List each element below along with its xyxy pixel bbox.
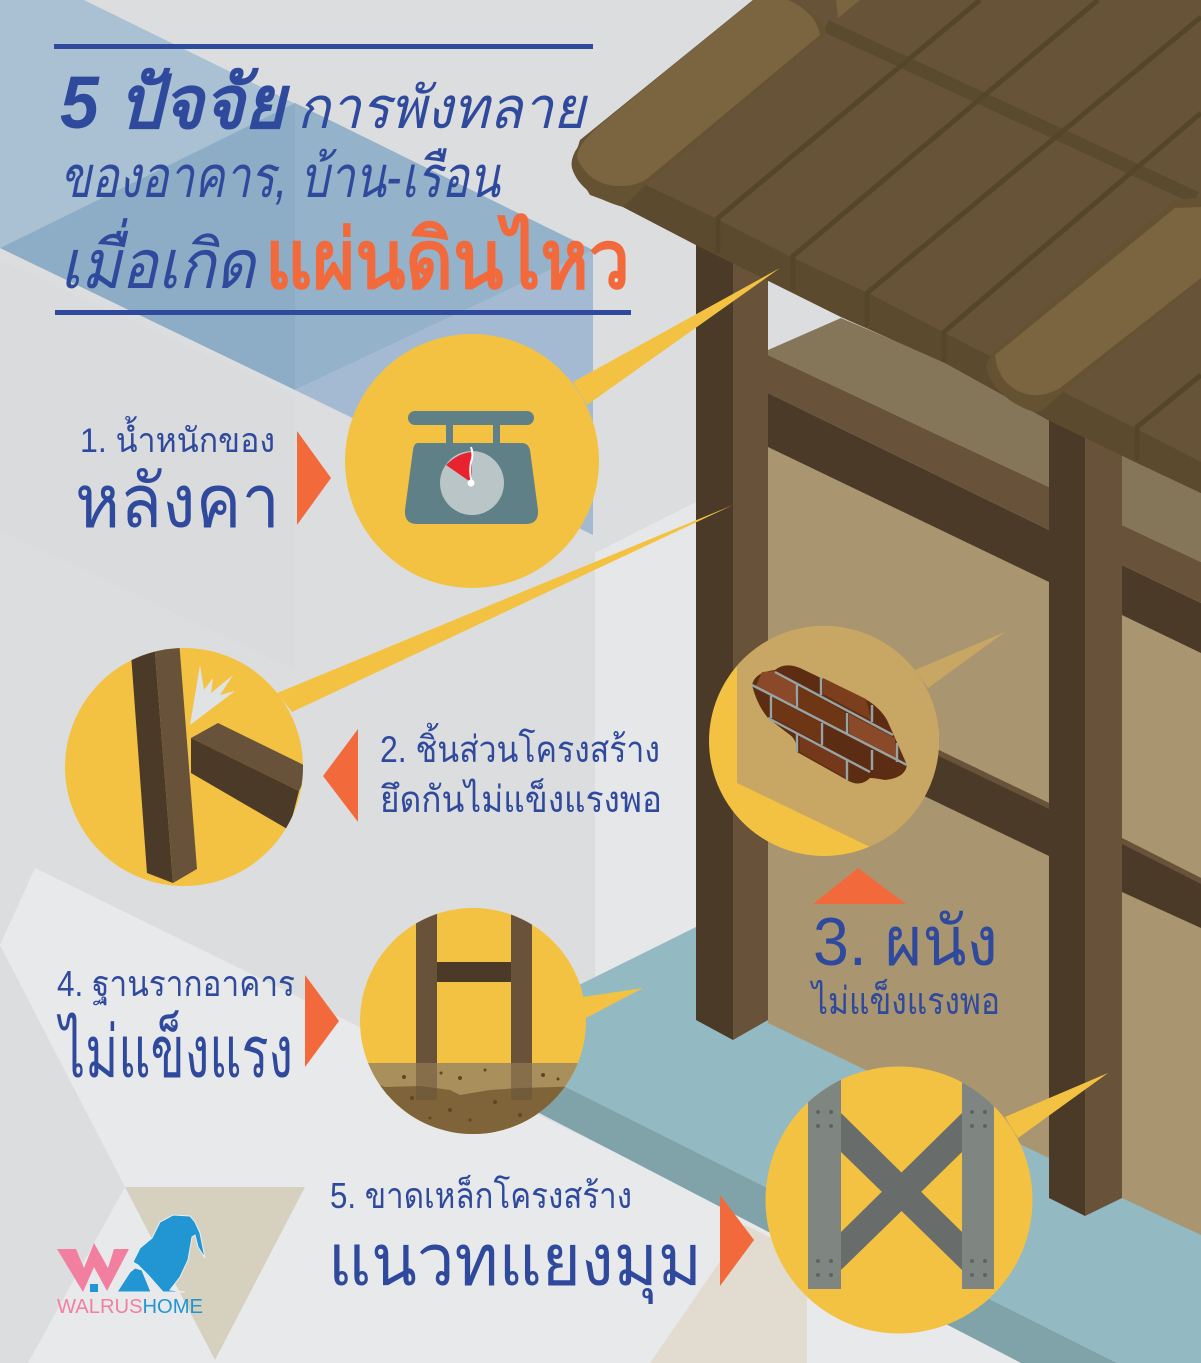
callout tail 4 xyxy=(583,988,643,1018)
top beam xyxy=(768,355,1201,603)
icon: post and beam joint xyxy=(130,640,310,883)
callout tail 1 xyxy=(573,268,780,405)
factor 4 label xyxy=(57,963,295,1093)
roof fascia xyxy=(623,185,1201,493)
icon: posts in soil xyxy=(368,914,578,1134)
title: เมื่อเกิด xyxy=(60,218,258,303)
factor 5 label xyxy=(328,1173,702,1304)
callout circle 4 xyxy=(360,908,586,1134)
arrow 2 xyxy=(323,729,358,822)
logo walrus xyxy=(117,1215,205,1292)
upper wall shadow xyxy=(768,318,1201,562)
title: ของอาคาร, บ้าน-เรือน xyxy=(60,145,501,210)
factor 5 label: แนวทแยงมุม xyxy=(328,1221,702,1304)
callout 2: weak joints xyxy=(65,505,733,886)
callout 3: wall xyxy=(709,610,1005,856)
logo window xyxy=(90,1284,98,1292)
arrow 3 xyxy=(813,868,906,904)
roll tile right xyxy=(986,197,1201,413)
title rule bottom xyxy=(55,310,631,315)
callout tail 3 xyxy=(915,632,1005,688)
title rule top xyxy=(54,44,593,49)
callout 4: foundation xyxy=(360,908,643,1134)
icon: steel X brace xyxy=(808,1066,994,1289)
roll tile left xyxy=(572,0,860,207)
factor 2 label: ยึดกันไม่แข็งแรงพอ xyxy=(380,776,662,820)
arrow 1 xyxy=(297,431,331,525)
factor 3 label: ไม่แข็งแรงพอ xyxy=(809,978,1000,1023)
roof seam xyxy=(826,26,1196,198)
icon: exposed bricks xyxy=(752,665,907,784)
middle beam xyxy=(768,668,1201,928)
factor 4 label: 4. ฐานรากอาคาร xyxy=(57,963,295,1006)
wall tint xyxy=(737,626,939,846)
floor slab xyxy=(470,925,1201,1363)
factor 1 label: 1. น้ำหนักของ xyxy=(80,416,275,460)
title: 5 ปัจจัย xyxy=(60,61,290,144)
logo W mark xyxy=(57,1243,129,1292)
wall xyxy=(768,440,1201,1235)
callout tail 2 xyxy=(277,505,733,712)
arrow 5 xyxy=(720,1195,754,1286)
post left xyxy=(696,240,768,1040)
callout circle 2 xyxy=(65,648,303,886)
factor 4 label: ไม่แข็งแรง xyxy=(57,1010,293,1093)
callout 5: diagonal bracing xyxy=(766,1066,1108,1334)
roof main xyxy=(572,0,1201,493)
arrow 4 xyxy=(305,975,339,1067)
factor 2 label xyxy=(380,722,662,820)
roof grooves xyxy=(718,0,1201,460)
post right xyxy=(1049,415,1122,1216)
title xyxy=(60,61,630,306)
title: แผ่นดินไหว xyxy=(265,213,630,306)
callout circle 1 xyxy=(345,334,599,588)
logo wordmark: WALRUSHOME xyxy=(57,1296,203,1318)
callout tail 5 xyxy=(1005,1073,1108,1138)
house structure xyxy=(696,240,1201,1235)
factor 3 label: 3. ผนัง xyxy=(813,904,998,980)
factor 1 label: หลังคา xyxy=(75,460,280,543)
roof xyxy=(572,0,1201,493)
icon: scale xyxy=(405,411,538,524)
logo: WalrusHome xyxy=(57,1215,205,1318)
factor 3 label xyxy=(809,904,1000,1023)
factor 5 label: 5. ขาดเหล็กโครงสร้าง xyxy=(330,1173,632,1216)
callout circle 5 xyxy=(766,1066,1032,1334)
factor 2 label: 2. ชิ้นส่วนโครงสร้าง xyxy=(380,722,660,770)
callout circle 3 xyxy=(709,626,939,856)
factor 1 label xyxy=(75,416,280,543)
title: การพังทลาย xyxy=(297,76,589,141)
callout 1: roof weight xyxy=(345,268,780,588)
